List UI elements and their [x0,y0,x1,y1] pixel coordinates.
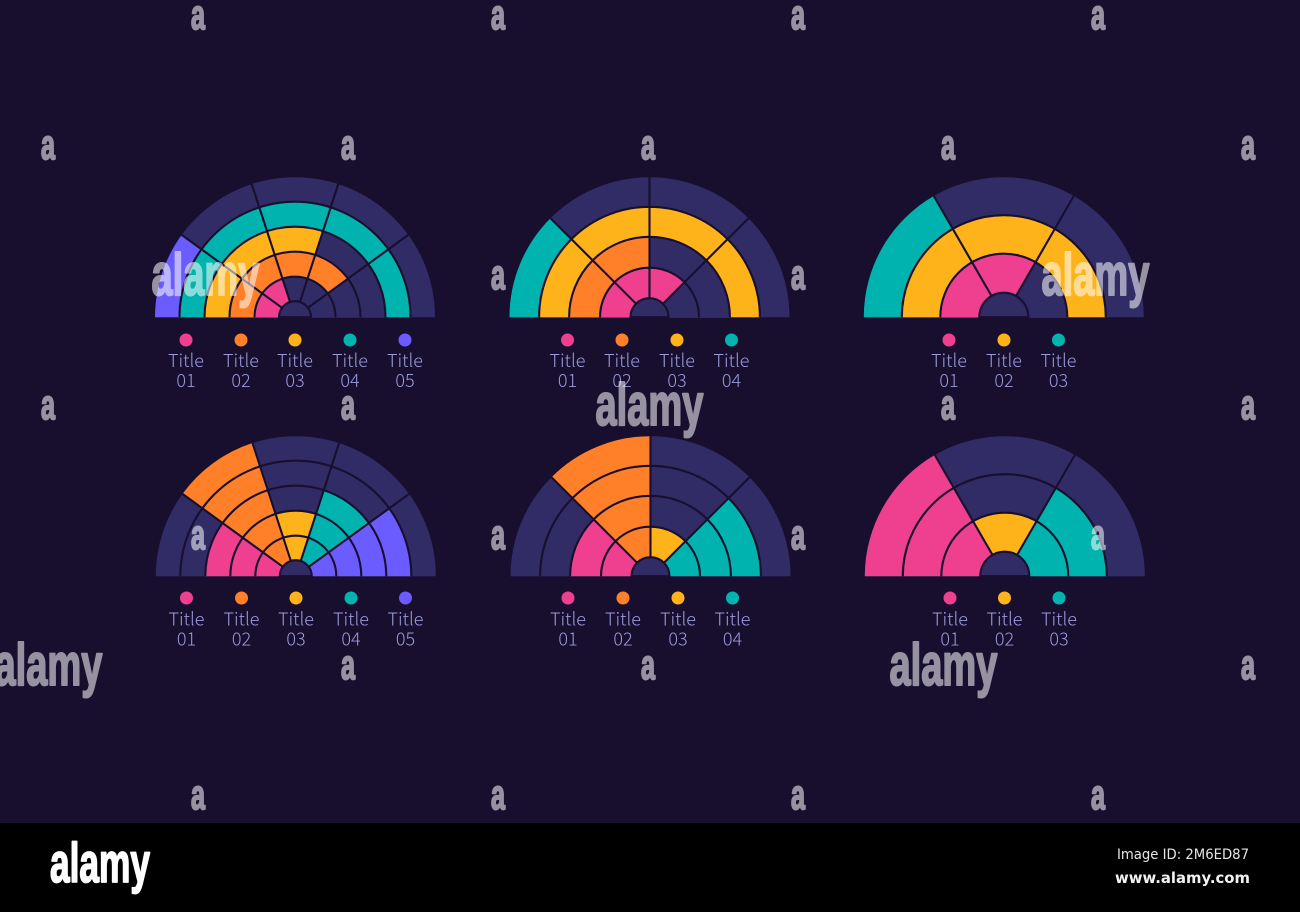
legend: 03 [667,367,687,393]
legend: Title [987,606,1022,632]
legend: Title [278,606,314,632]
watermark: small letters: a [641,123,656,169]
legend: 04 [341,626,361,652]
legend: Title [550,606,586,632]
watermark: small letters: a [341,643,356,689]
panel: three sector radial chart, bottom right [865,436,1145,652]
watermark: small letters: a [191,513,206,559]
center hub [630,298,668,317]
watermark: large wordmarks [0,242,1150,698]
watermark: small letters: a [41,123,56,169]
legend: 03 [1049,367,1068,393]
chart: three sectors with three rings [864,177,1144,317]
center hub [279,301,311,317]
sector 2 [552,436,650,576]
legend: 03 [286,626,306,652]
legend: 02 [994,367,1014,393]
watermark: small letters: a [341,123,356,169]
panel: four sector radial chart, top middle [510,177,790,393]
legend: 01 [558,626,578,652]
legend: Title [277,347,313,373]
sector 2 [973,513,1037,576]
sector 1 [155,235,295,317]
legend: Title [986,347,1022,373]
center hub [280,560,312,576]
sector 3 [276,511,316,576]
legend: 05 [396,626,415,652]
sector 2 [202,207,295,317]
legend [932,592,1077,652]
watermark: large wordmarks: alamy [1042,242,1150,308]
legend: Title [333,606,369,632]
sector 3 [650,527,686,576]
legend: Title [168,347,204,373]
legend: 01 [177,626,196,652]
watermark: small letters: a [791,253,806,299]
legend: Title [387,347,423,373]
legend: 01 [939,367,959,393]
footer logo: alamy [50,832,150,894]
legend: 03 [285,367,305,393]
chart: three sectors with three rings [865,436,1145,576]
legend: Title [605,606,641,632]
center hub [979,293,1028,317]
legend [169,592,423,652]
legend: 02 [231,367,251,393]
watermark: small letters: a [1241,383,1256,429]
panel: four sector radial chart, bottom middle [510,436,790,652]
legend: Title [550,347,585,373]
legend: 05 [395,367,415,393]
legend: Title [604,347,640,373]
watermark: small letters: a [491,773,506,819]
sector 2 [953,215,1055,317]
watermark: large wordmarks: alamy [890,632,998,698]
watermark: small letters: a [791,513,806,559]
watermark: small letters: a [1091,773,1106,819]
watermark: small letters: a [491,253,506,299]
legend: Title [223,347,259,373]
sector 2 [183,443,296,576]
chart: four sectors with four rings [510,436,790,576]
watermark: small letters: a [791,773,806,819]
legend: 04 [723,626,742,652]
legend: 01 [176,367,196,393]
watermark: large wordmarks: alamy [596,372,704,438]
sector 5 [295,249,410,317]
chart: five sectors with five rings [155,177,435,317]
legend: Title [932,606,968,632]
legend: 03 [1049,626,1069,652]
watermark: small letters: a [341,383,356,429]
center hub [980,552,1029,576]
image id: Image ID: 2M6ED87 [1117,847,1249,863]
sector 3 [650,207,728,317]
sector 4 [650,239,760,317]
chart: four sectors with four rings [510,177,790,317]
sector 1 [510,218,650,317]
watermark: small letters: a [641,643,656,689]
legend: Title [169,606,204,632]
legend [931,334,1076,393]
legend: Title [224,606,259,632]
legend: Title [715,606,750,632]
panel: five sector radial chart, top left [155,177,435,393]
legend: Title [1041,347,1076,373]
sector 1 [865,455,1005,576]
legend: 01 [558,367,577,393]
footer bar [0,823,1300,912]
sector 4 [296,490,369,576]
watermark: small letters: a [41,383,56,429]
watermark: small letters: a [1241,643,1256,689]
legend [550,334,749,393]
legend: Title [659,347,695,373]
legend: Title [931,347,967,373]
sector 3 [1005,488,1107,576]
legend: 04 [340,367,360,393]
watermark: large wordmarks: alamy [152,242,260,308]
watermark: small letters: a [941,383,956,429]
sector 3 [1004,229,1106,317]
chart: five sectors with five rings [156,436,436,576]
sector 4 [295,207,388,317]
legend: 01 [940,626,960,652]
sector 3 [259,202,331,317]
legend: 02 [612,367,632,393]
legend: 02 [995,626,1014,652]
center hub [632,557,670,576]
website: www.alamy.com [1115,869,1250,887]
legend: 03 [668,626,688,652]
panel: five sector radial chart, bottom left [156,436,436,652]
legend: 02 [232,626,251,652]
watermark: small letters: a [1091,513,1106,559]
legend: Title [1041,606,1077,632]
watermark: small letters: a [1241,123,1256,169]
legend [550,592,750,652]
legend: Title [332,347,368,373]
legend: 04 [722,367,741,393]
sector 5 [296,508,411,576]
panel: three sector radial chart, top right [864,177,1144,393]
watermark: small letters: a [191,773,206,819]
legend: Title [660,606,696,632]
sector 4 [650,498,761,576]
watermark: small letters: a [941,123,956,169]
sector 2 [571,207,650,317]
legend: Title [388,606,423,632]
sector 1 [205,523,296,576]
sector 1 [570,519,650,576]
legend [168,334,423,393]
watermark: small letters: a [491,513,506,559]
legend: Title [714,347,749,373]
legend: 02 [613,626,633,652]
sector 1 [864,196,1004,317]
